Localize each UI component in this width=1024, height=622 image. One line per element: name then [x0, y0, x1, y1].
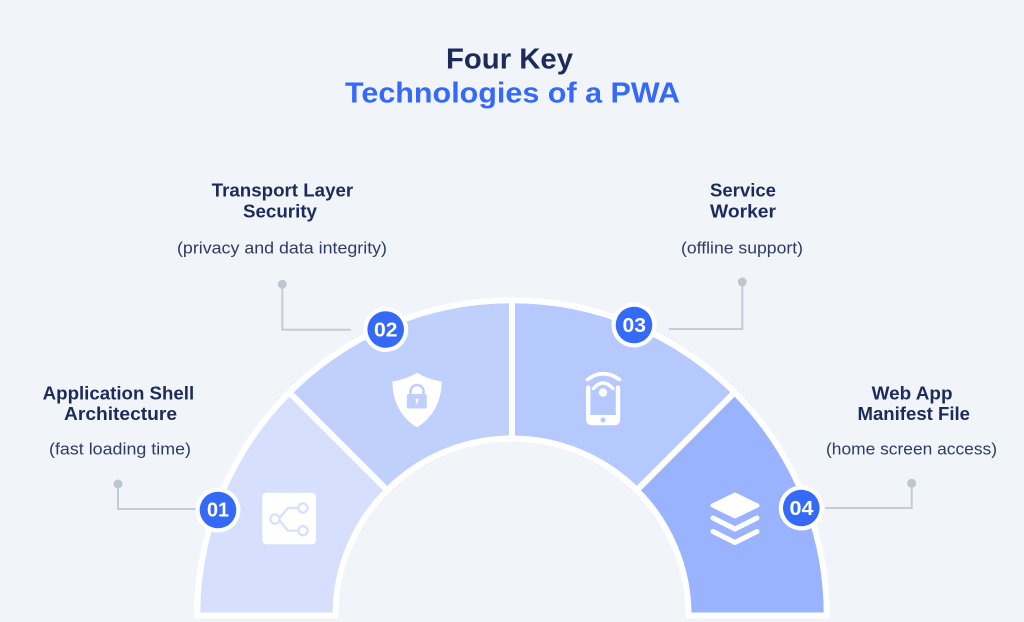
badge 03: 03 — [622, 315, 646, 337]
text block: application shell architecture: (fast loading time) — [49, 440, 191, 458]
badge 01: 01 — [207, 500, 229, 522]
icon: security shield — [393, 373, 442, 427]
text block: web app manifest file: Web App — [872, 383, 952, 403]
badge 02 — [363, 307, 408, 352]
text block: transport layer security: (privacy and data integrity) — [177, 240, 387, 258]
panel: segment 04 manifest file — [637, 392, 827, 616]
connector 01 — [114, 480, 200, 509]
title — [345, 44, 680, 110]
connector 03 — [669, 278, 747, 329]
icon: share nodes — [262, 493, 316, 544]
panel: segment 02 transport layer security — [289, 300, 512, 490]
text block: web app manifest file — [826, 383, 997, 458]
text block: application shell architecture — [43, 383, 194, 458]
badge 03 — [612, 302, 656, 348]
text block: transport layer security — [177, 181, 387, 258]
text block: service worker: Worker — [710, 201, 776, 221]
icon: phone with wireless signal — [587, 374, 620, 424]
badge 04 — [779, 486, 824, 530]
text block: transport layer security: Security — [243, 201, 317, 221]
text block: web app manifest file: Manifest File — [858, 404, 970, 424]
badge 04: 04 — [790, 498, 814, 520]
connector 04 — [825, 479, 916, 508]
text block: web app manifest file: (home screen access) — [826, 440, 997, 458]
text block: application shell architecture: Architecture — [64, 404, 177, 424]
title: Four Key — [446, 44, 573, 76]
text block: application shell architecture: Application Shell — [43, 383, 194, 403]
icon: stacked layers — [712, 494, 758, 542]
text block: service worker: Service — [710, 181, 776, 201]
badge 02: 02 — [374, 320, 398, 342]
text block: service worker — [681, 181, 803, 258]
text block: transport layer security: Transport Layer — [212, 181, 353, 201]
title: Technologies of a PWA — [345, 78, 680, 110]
panel: segment 03 service worker — [512, 300, 735, 490]
connector 02 — [278, 280, 351, 330]
panel: segment 01 application shell — [197, 392, 387, 616]
badge 01 — [196, 488, 240, 532]
text block: service worker: (offline support) — [681, 240, 803, 258]
